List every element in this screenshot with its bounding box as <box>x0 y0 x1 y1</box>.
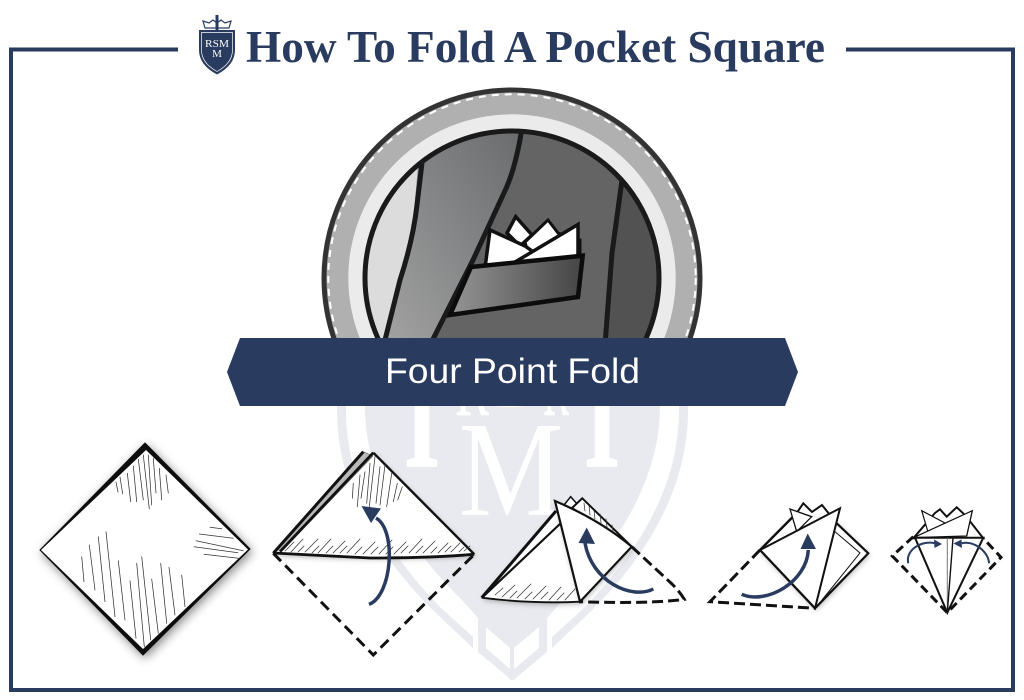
watermark shield: I <box>584 296 620 509</box>
banner label: Four Point Fold <box>385 352 640 391</box>
arrow: fold left <box>578 528 653 592</box>
step 2: fold in half <box>273 452 474 655</box>
arrow: fold up right <box>742 534 816 597</box>
watermark shield: M <box>458 395 564 545</box>
step 3: fold right corner <box>482 497 684 602</box>
watermark shield: R <box>543 317 569 439</box>
arrow: fold left side in <box>908 540 942 563</box>
pocket square points <box>485 217 580 268</box>
medallion: jacket with pocket square <box>322 88 702 338</box>
pocket welt <box>450 256 583 315</box>
logo crest: M <box>212 48 222 60</box>
step 1: open square <box>40 443 250 655</box>
watermark shield: S <box>467 308 557 430</box>
arrow: fold up <box>362 506 389 604</box>
watermark shield: R <box>455 317 489 439</box>
arrow: fold right side in <box>954 540 989 563</box>
logo crest: RSM <box>205 39 229 50</box>
logo crest <box>199 15 235 74</box>
banner <box>227 338 798 406</box>
step 5: fold sides to centre <box>892 507 1001 613</box>
title: How To Fold A Pocket Square <box>246 22 825 72</box>
step 4: fold left corner <box>710 503 868 608</box>
watermark shield <box>337 296 688 680</box>
watermark shield: I <box>404 296 440 509</box>
